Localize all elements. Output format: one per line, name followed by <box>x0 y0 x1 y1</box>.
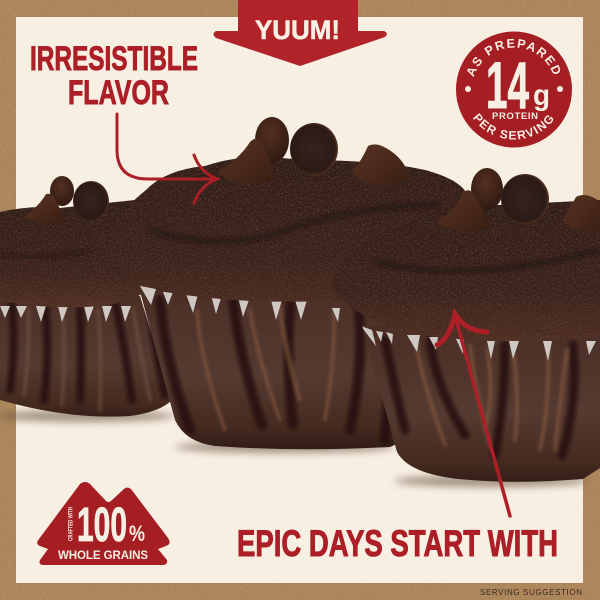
whole grains label: WHOLE GRAINS <box>58 550 148 562</box>
badge bottom text: PER SERVING <box>473 113 554 140</box>
serving suggestion note: SERVING SUGGESTION <box>480 588 582 597</box>
left muffin top <box>0 198 150 310</box>
middle muffin chips <box>218 117 409 186</box>
badge top text: AS PREPARED <box>467 38 560 77</box>
right muffin top <box>330 198 600 348</box>
muffin: middle <box>134 117 466 458</box>
arrow: flavor to chip <box>117 114 217 203</box>
left muffin chips <box>24 176 109 224</box>
middle muffin wrapper <box>138 284 395 450</box>
arrow: epic days to muffin <box>437 312 510 516</box>
whole grains badge <box>37 482 170 565</box>
heading: irresistible flavor: FLAVOR <box>68 74 169 112</box>
100 percent: 100 <box>77 499 127 552</box>
middle muffin top <box>134 158 466 302</box>
crafted with label: CRAFTED WITH <box>68 507 74 541</box>
right muffin wrapper <box>362 325 600 482</box>
heading: irresistible flavor <box>30 40 198 112</box>
banner text: YUUM! <box>255 15 340 45</box>
percent sign: % <box>129 521 145 546</box>
muffin: right <box>330 168 600 490</box>
right muffin chips <box>437 168 600 232</box>
heading: irresistible flavor: IRRESISTIBLE <box>30 40 198 78</box>
left muffin wrapper <box>0 296 170 417</box>
badge protein label: PROTEIN <box>492 111 538 122</box>
protein badge <box>456 32 572 148</box>
muffin: left <box>0 176 180 425</box>
badge value: 14 <box>486 48 529 122</box>
banner arrow <box>214 0 387 66</box>
badge unit: g <box>533 79 550 112</box>
